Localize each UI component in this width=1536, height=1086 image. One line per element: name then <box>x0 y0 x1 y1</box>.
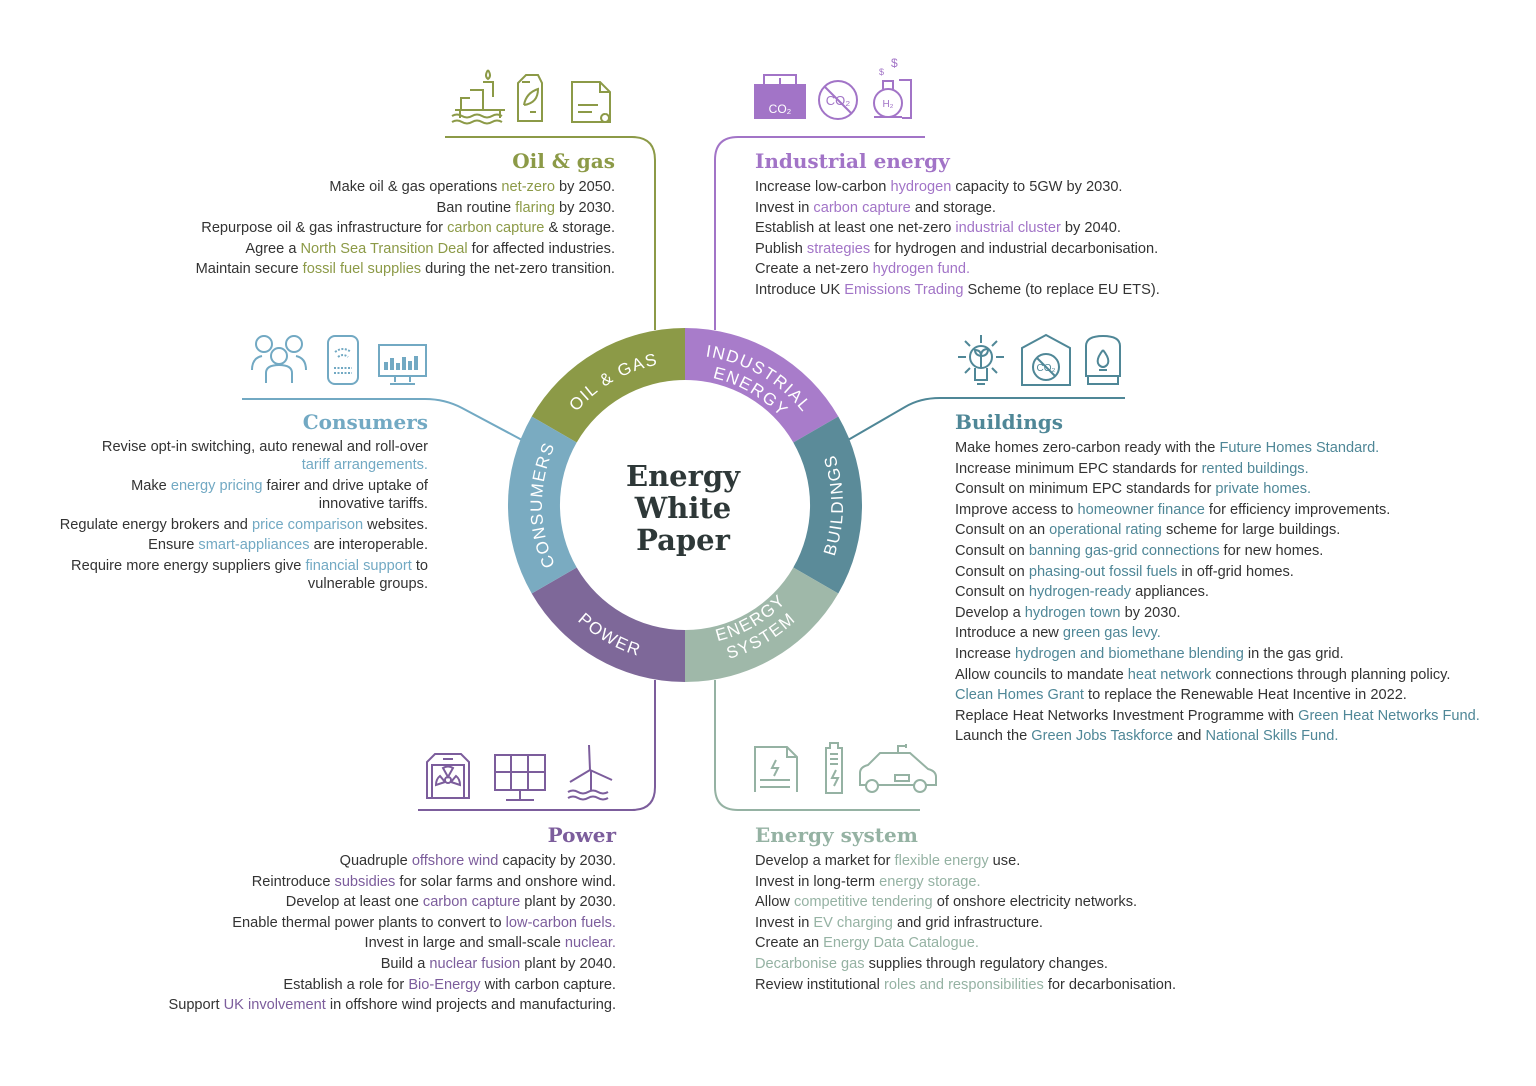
icons: industrial: CO₂ <box>769 102 792 116</box>
heading: buildings: Buildings <box>955 410 1063 434</box>
heading: consumers: Consumers <box>303 410 428 434</box>
panel: buildings: Launch the Green Jobs Taskforce and National Skills Fund. <box>955 728 1338 744</box>
ring: OIL & GAS <box>570 354 656 410</box>
ring: INDUSTRIAL <box>706 345 808 412</box>
icons: power <box>427 745 612 800</box>
icons: buildings <box>958 335 1120 385</box>
center title: White <box>634 491 731 525</box>
panel: oil & gas: Maintain secure fossil fuel supplies during the net-zero transition. <box>196 261 615 277</box>
panel: buildings: Consult on minimum EPC standards for private homes. <box>955 481 1311 497</box>
panel: buildings: Consult on banning gas-grid connections for new homes. <box>955 543 1323 559</box>
panel: buildings: Allow councils to mandate heat network connections through planning policy. <box>955 667 1450 683</box>
connector: energy system <box>715 680 920 810</box>
panel: buildings: Make homes zero-carbon ready with the Future Homes Standard. <box>955 440 1379 456</box>
panel: consumers: Revise opt-in switching, auto renewal and roll-over <box>102 439 428 455</box>
panel: power: Establish a role for Bio-Energy with carbon capture. <box>283 977 616 993</box>
ring <box>508 328 862 682</box>
icons: industrial: $ <box>891 56 898 70</box>
ring: SYSTEM <box>727 613 794 658</box>
connector: oil & gas <box>445 137 655 330</box>
panel: buildings <box>955 410 1480 744</box>
panel: oil & gas: Repurpose oil & gas infrastructure for carbon capture & storage. <box>201 220 615 236</box>
panel: oil & gas: Ban routine flaring by 2030. <box>436 200 615 216</box>
panel: industrial energy: Invest in carbon capture and storage. <box>755 200 996 216</box>
ring: CONSUMERS <box>530 444 554 568</box>
panel: power: Support UK involvement in offshore wind projects and manufacturing. <box>168 997 616 1013</box>
panel: industrial energy: Establish at least one net-zero industrial cluster by 2040. <box>755 220 1121 236</box>
panel: power <box>168 823 616 1013</box>
icons: industrial: CO₂ <box>826 93 850 108</box>
panel: energy system: Create an Energy Data Catalogue. <box>755 935 979 951</box>
panel: consumers: Regulate energy brokers and price comparison websites. <box>60 517 428 533</box>
center title: Paper <box>636 523 731 557</box>
panel: consumers: vulnerable groups. <box>308 576 428 592</box>
panel: oil & gas: Agree a North Sea Transition Deal for affected industries. <box>245 241 615 257</box>
panel: buildings: Replace Heat Networks Investment Programme with Green Heat Networks Fund. <box>955 708 1480 724</box>
panel: power: Build a nuclear fusion plant by 2040. <box>381 956 616 972</box>
heading: oil & gas: Oil & gas <box>512 149 615 173</box>
panel: energy system: Allow competitive tendering of onshore electricity networks. <box>755 894 1137 910</box>
panel: energy system <box>755 823 1176 993</box>
heading: energy system: Energy system <box>755 823 918 847</box>
panel: industrial energy: Introduce UK Emissions Trading Scheme (to replace EU ETS). <box>755 282 1160 298</box>
panel: power: Reintroduce subsidies for solar farms and onshore wind. <box>252 874 616 890</box>
panel: power: Develop at least one carbon capture plant by 2030. <box>286 894 616 910</box>
panel: oil & gas: Make oil & gas operations net-zero by 2050. <box>329 179 615 195</box>
heading: power: Power <box>548 823 616 847</box>
heading: industrial energy: Industrial energy <box>755 149 950 173</box>
panel: industrial energy: Publish strategies for hydrogen and industrial decarbonisation. <box>755 241 1158 257</box>
panel: consumers: innovative tariffs. <box>319 496 428 512</box>
icons: consumers <box>252 336 426 384</box>
panel: energy system: Decarbonise gas supplies through regulatory changes. <box>755 956 1108 972</box>
panel: industrial energy <box>755 149 1160 298</box>
connector: consumers <box>242 399 522 440</box>
icons: industrial: $ <box>879 67 884 77</box>
panel: consumers <box>60 410 428 592</box>
panel: consumers: tariff arrangements. <box>302 457 428 473</box>
ring: ENERGY <box>716 594 782 641</box>
panel: industrial energy: Increase low-carbon hydrogen capacity to 5GW by 2030. <box>755 179 1122 195</box>
panel: buildings: Consult on an operational rating scheme for large buildings. <box>955 522 1340 538</box>
ring: BUILDINGS <box>824 456 843 556</box>
panel: consumers: Make energy pricing fairer and drive uptake of <box>131 478 428 494</box>
panel: buildings: Consult on phasing-out fossil fuels in off-grid homes. <box>955 564 1294 580</box>
center title: Energy <box>626 459 741 493</box>
panel: buildings: Increase minimum EPC standards for rented buildings. <box>955 461 1309 477</box>
panel: energy system: Review institutional roles and responsibilities for decarbonisation. <box>755 977 1176 993</box>
icons: industrial <box>755 56 911 119</box>
panel: buildings: Develop a hydrogen town by 2030. <box>955 605 1181 621</box>
panel: buildings: Consult on hydrogen-ready appliances. <box>955 584 1209 600</box>
icons: energy system <box>755 743 936 793</box>
panel: consumers: Ensure smart-appliances are interoperable. <box>148 537 428 553</box>
panel: buildings: Clean Homes Grant to replace the Renewable Heat Incentive in 2022. <box>955 687 1407 703</box>
connector: industrial <box>715 137 925 330</box>
panel: energy system: Invest in EV charging and grid infrastructure. <box>755 915 1043 931</box>
center title <box>626 459 741 557</box>
panel: buildings: Introduce a new green gas levy. <box>955 625 1161 641</box>
icons: buildings: CO₂ <box>1037 363 1056 374</box>
icons: oil & gas <box>452 70 610 124</box>
panel: energy system: Develop a market for flexible energy use. <box>755 853 1020 869</box>
icons: industrial: H₂ <box>882 99 894 110</box>
ring: POWER <box>578 612 640 656</box>
panel: power: Quadruple offshore wind capacity by 2030. <box>340 853 616 869</box>
panel: energy system: Invest in long-term energy storage. <box>755 874 981 890</box>
panel: buildings: Improve access to homeowner finance for efficiency improvements. <box>955 502 1390 518</box>
panel: buildings: Increase hydrogen and biomethane blending in the gas grid. <box>955 646 1344 662</box>
panel: power: Invest in large and small-scale nuclear. <box>365 935 616 951</box>
panel: power: Enable thermal power plants to convert to low-carbon fuels. <box>232 915 616 931</box>
panel: consumers: Require more energy suppliers give financial support to <box>71 558 428 574</box>
panel: oil & gas <box>196 149 615 277</box>
connector: buildings <box>848 398 1125 440</box>
connector: power <box>418 680 655 810</box>
panel: industrial energy: Create a net-zero hydrogen fund. <box>755 261 970 277</box>
ring: ENERGY <box>714 366 788 413</box>
